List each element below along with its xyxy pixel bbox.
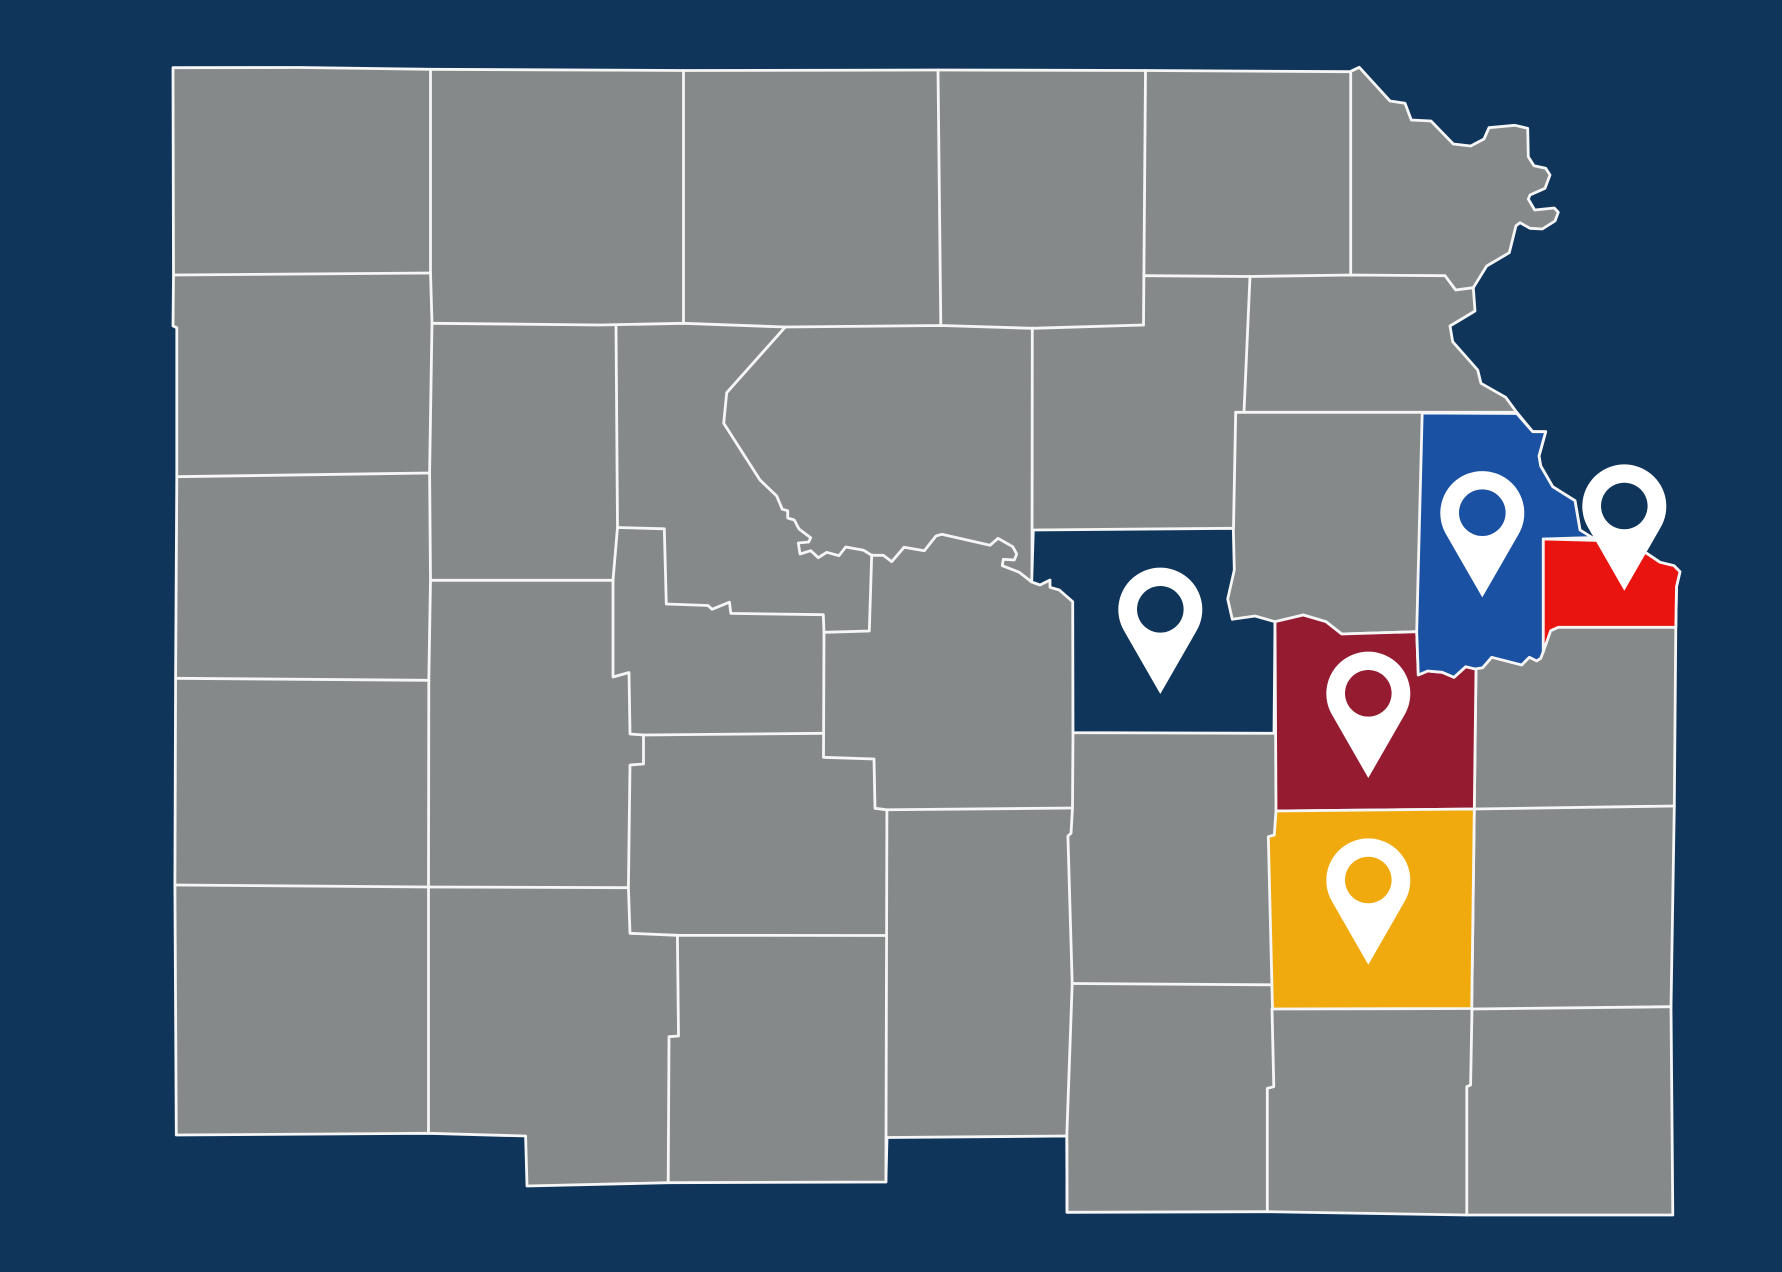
county: navy highlighted <box>1032 528 1275 733</box>
county: blue highlighted <box>1417 413 1592 677</box>
state silhouette in gray <box>173 67 1680 1215</box>
map: all counties <box>173 67 1680 1215</box>
pin: gold county <box>1326 838 1410 965</box>
county: red highlighted <box>1543 539 1680 652</box>
county: gold highlighted <box>1268 809 1474 1009</box>
pin: navy county <box>1118 568 1202 694</box>
pin: maroon county <box>1326 652 1410 778</box>
county boundary lines <box>174 69 1674 1215</box>
pin: red county <box>1582 464 1666 591</box>
pin: blue county <box>1440 471 1524 597</box>
county: maroon highlighted <box>1275 615 1476 811</box>
